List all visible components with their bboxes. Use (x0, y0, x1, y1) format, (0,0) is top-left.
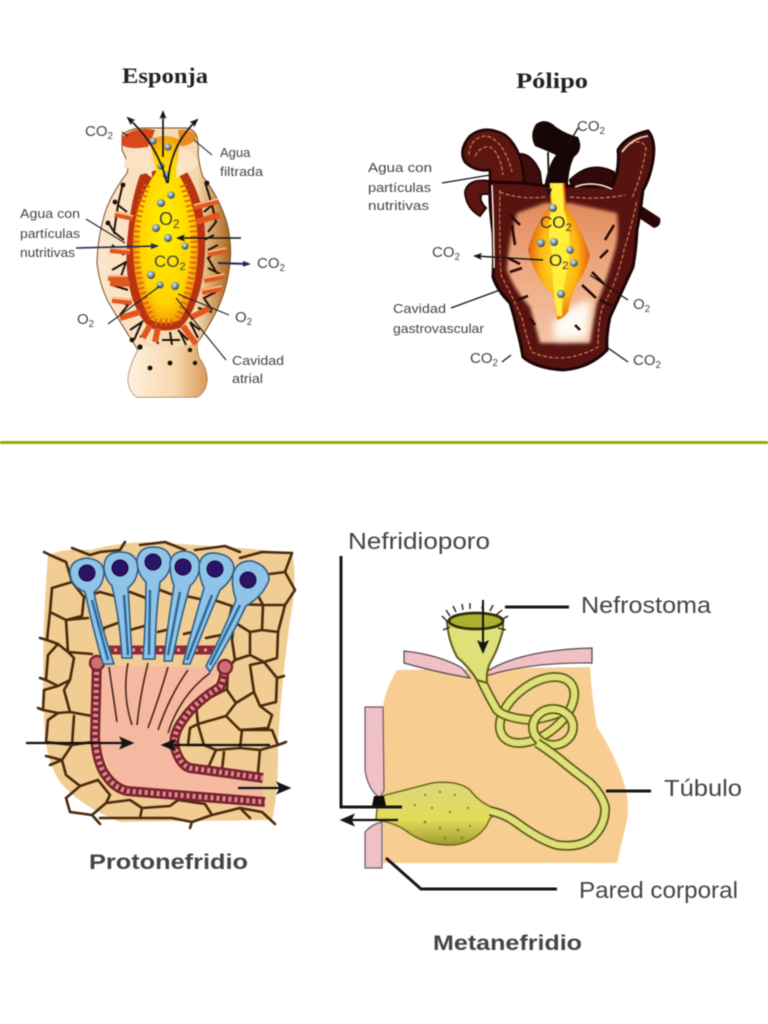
sponge labels: 2 (180, 261, 186, 273)
title: Pólipo: Pólipo (516, 68, 588, 93)
meta labels: Nefridioporo (348, 528, 490, 554)
nephrostome rim (449, 613, 503, 629)
cilia (109, 663, 210, 733)
nuclei (79, 554, 256, 588)
end cells (90, 656, 232, 674)
duct wall left (95, 660, 265, 802)
sponge labels: Agua con (20, 206, 80, 221)
polyp labels: Cavidad (393, 301, 446, 316)
sponge body (97, 128, 231, 397)
diagram: sponge (20, 112, 285, 397)
polyp labels: partículas (368, 180, 432, 195)
sponge labels: partículas (20, 226, 81, 241)
polyp labels: CO (432, 244, 454, 261)
bladder (376, 782, 500, 845)
yellow atrium (133, 136, 198, 323)
leader lines (86, 132, 229, 360)
diagram: protonefridio (26, 542, 295, 828)
top body wall right (486, 648, 592, 676)
tan tissue background (43, 542, 295, 822)
green divider line (0, 441, 768, 444)
top body wall left (404, 651, 470, 678)
tan coelom (383, 667, 628, 863)
polyp labels: 2 (562, 260, 568, 272)
dark atrium wall (126, 170, 205, 330)
pore dark (372, 796, 386, 806)
left curled tentacle (462, 130, 524, 195)
sponge labels: O (77, 311, 89, 328)
sponge labels: O (159, 209, 173, 229)
sponge labels: 2 (173, 218, 180, 231)
cilia on rim (442, 603, 508, 630)
central tentacle (532, 121, 580, 188)
polyp labels: CO (540, 213, 566, 232)
sponge labels: O (235, 309, 247, 326)
white lower cavity (552, 300, 590, 340)
sponge labels: CO (85, 123, 108, 140)
meta labels: Nefrostoma (581, 592, 711, 618)
top pale channel walls (124, 148, 152, 178)
sponge base (128, 343, 207, 397)
polyp labels: 2 (600, 126, 605, 137)
polyp labels: 2 (656, 360, 661, 371)
meta labels: Túbulo (664, 775, 742, 801)
sponge labels: Agua (220, 145, 251, 160)
polyp labels: Agua con (368, 160, 432, 175)
flame inner channels (92, 590, 240, 665)
polyp arrows and leaders (442, 128, 628, 362)
polyp labels: 2 (645, 304, 650, 315)
Pared corporal leader (386, 858, 557, 889)
diagram: metanefridio (341, 528, 742, 903)
big tubule loop (488, 664, 586, 756)
rim (122, 129, 155, 148)
polyp labels: O (633, 296, 645, 313)
polyp labels: O (549, 251, 562, 270)
polyp labels: 2 (492, 358, 498, 369)
polyp labels (368, 118, 661, 371)
pale highlights (492, 136, 648, 268)
sponge labels: 2 (108, 131, 113, 142)
polyp labels: 2 (454, 252, 460, 263)
polyp labels: CO (577, 118, 600, 135)
tissue cell network (38, 542, 295, 828)
tubule tail (490, 743, 605, 846)
sponge labels: Cavidad (232, 353, 284, 368)
flame cells (70, 547, 269, 672)
caption: Metanefridio: Metanefridio (433, 932, 582, 955)
down arrow (482, 600, 484, 650)
flow arrows (26, 743, 287, 788)
small side tentacles (465, 180, 490, 216)
duct lumen (100, 665, 263, 797)
upper duct cell band (105, 646, 222, 654)
nephrostome funnel (447, 622, 503, 683)
particles (537, 204, 578, 298)
outflow arrows (128, 112, 197, 183)
duct wall right (174, 667, 263, 778)
left body wall upper (365, 707, 384, 798)
sponge labels: nutritivas (20, 245, 76, 260)
tubule link (478, 673, 565, 720)
nutrient particles (147, 138, 188, 290)
caption: Protonefridio: Protonefridio (89, 851, 248, 874)
polyp labels: CO (633, 352, 656, 369)
left body wall lower (365, 822, 382, 868)
small tubule loop (533, 709, 573, 745)
spicules (108, 201, 226, 344)
Tubulo leader (606, 790, 651, 792)
Nefridioporo leader (341, 556, 402, 807)
gastrovascular peach cavity (507, 203, 618, 343)
sponge labels: 2 (247, 317, 252, 328)
sponge labels: CO (154, 252, 180, 271)
meta labels (348, 528, 742, 903)
sponge labels: CO (257, 255, 280, 272)
dark striations (508, 215, 614, 330)
diagram: polyp (368, 118, 661, 371)
pores (106, 181, 209, 370)
sponge labels: atrial (232, 371, 263, 386)
polyp labels: CO (470, 350, 492, 367)
title: Esponja: Esponja (122, 63, 208, 88)
yellow gastric channel (528, 183, 590, 320)
polyp labels: gastrovascular (393, 321, 485, 336)
outlet arrow (344, 819, 398, 821)
spicule highlights (108, 199, 226, 300)
cell web (108, 182, 222, 345)
polyp labels: nutritivas (368, 198, 430, 213)
polyp labels: 2 (566, 222, 572, 234)
Nefrostoma leader (505, 606, 569, 608)
inflow arrows (76, 246, 157, 248)
polyp outer body (490, 131, 654, 370)
sponge labels (20, 123, 285, 386)
choanocyte fringe (136, 185, 194, 322)
tentacle and wall banding (469, 136, 646, 358)
sponge labels: 2 (89, 319, 94, 330)
sponge labels: 2 (280, 263, 285, 274)
bladder speckle (414, 791, 471, 840)
meta labels: Pared corporal (579, 877, 738, 903)
sponge labels: filtrada (220, 164, 264, 179)
